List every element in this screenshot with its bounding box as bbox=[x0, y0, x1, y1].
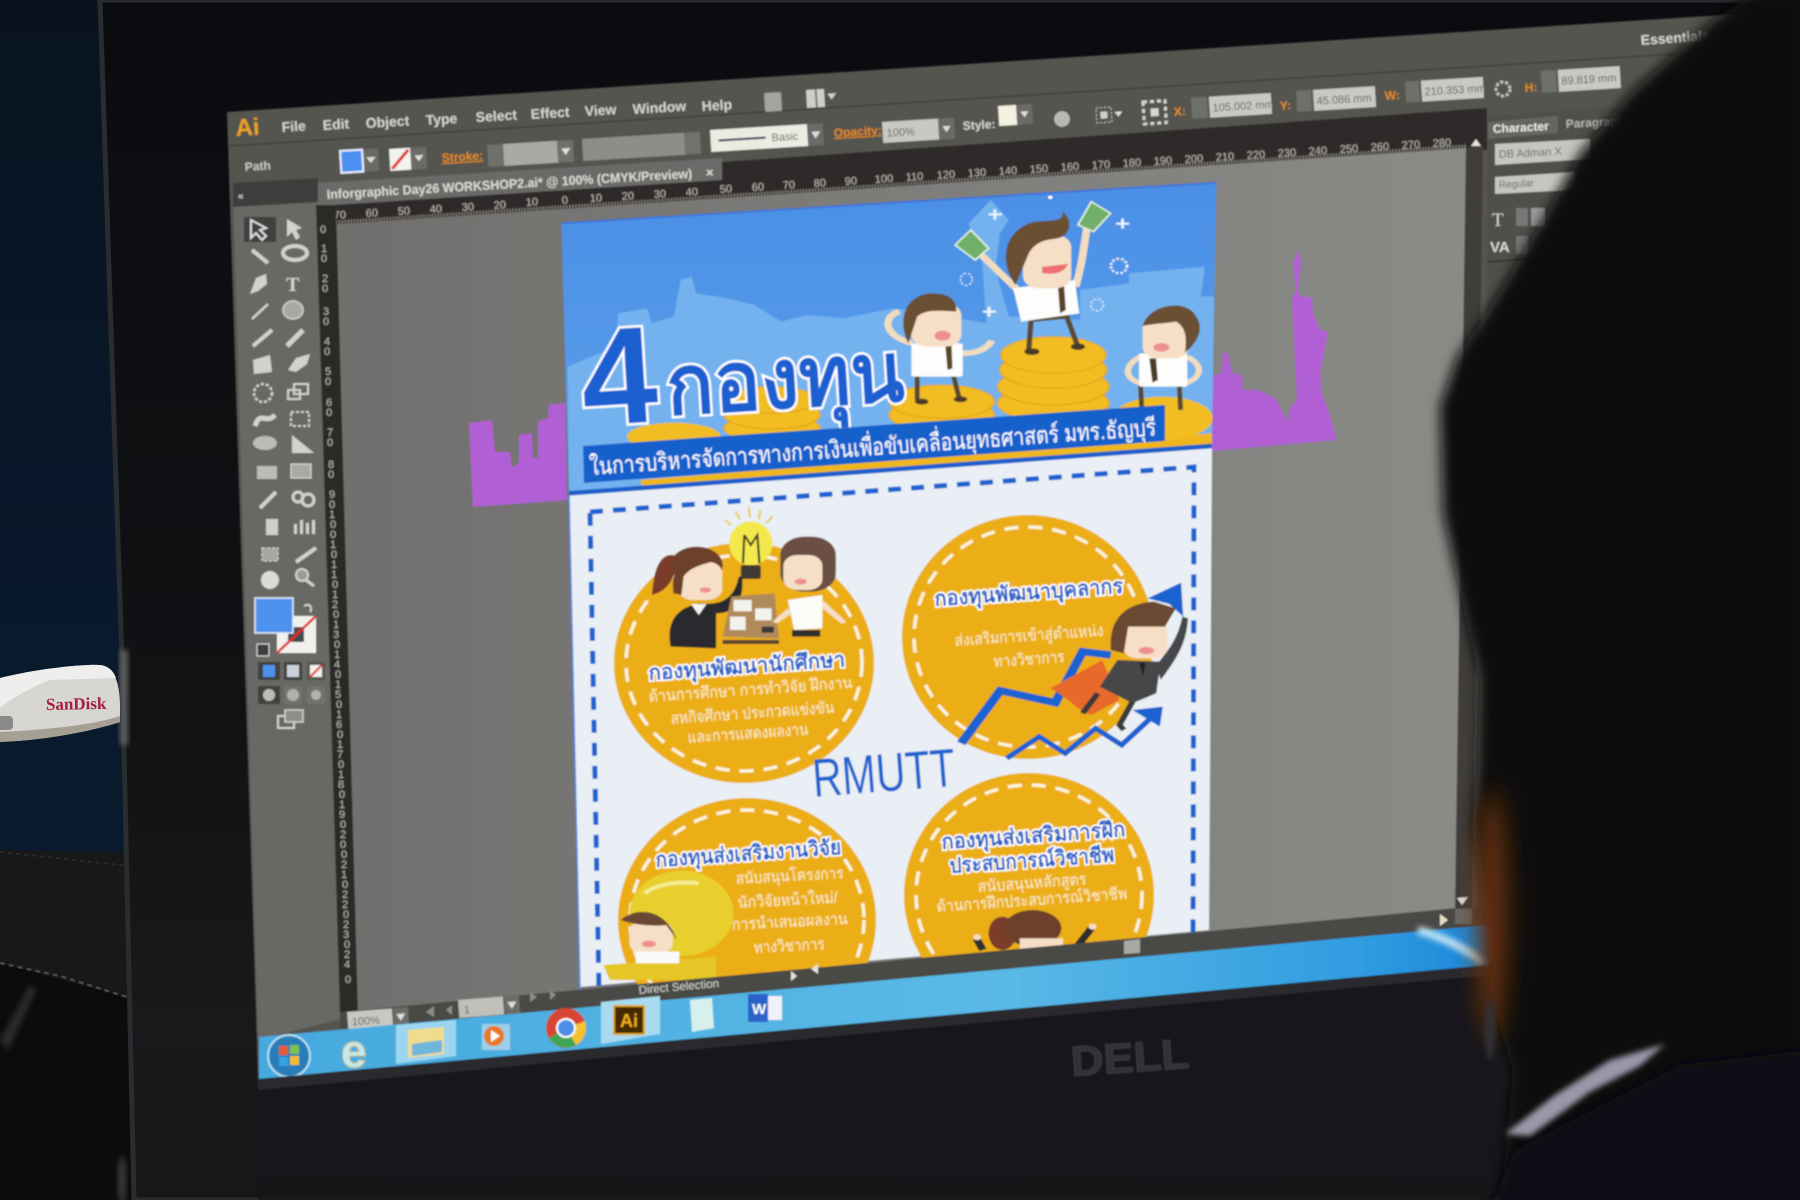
body: ทางวิชาการ bbox=[993, 649, 1065, 671]
right scrollbar bbox=[1455, 139, 1483, 918]
menu select: Select bbox=[475, 106, 518, 125]
person in foreground bbox=[1440, 0, 1800, 1200]
fill swatch bbox=[340, 149, 379, 173]
media player icon bbox=[482, 1024, 510, 1050]
artboard canvas bbox=[336, 148, 1466, 1015]
stroke color box bbox=[277, 616, 316, 653]
coins center stack bbox=[998, 337, 1109, 422]
hand tool bbox=[261, 571, 279, 589]
poster figures bbox=[603, 507, 1188, 980]
purple skyline left bbox=[469, 403, 567, 507]
fund circle: student development bbox=[614, 543, 874, 783]
body bbox=[648, 674, 853, 747]
horizontal ruler: 230 bbox=[1277, 147, 1297, 160]
horizontal ruler: 30 bbox=[653, 188, 666, 201]
subtitle band bbox=[583, 405, 1165, 483]
vertical ruler: 210220230240 bbox=[341, 859, 351, 986]
heading: ประสบการณ์วิชาชีพ bbox=[949, 843, 1115, 878]
variable width bbox=[582, 132, 701, 161]
x value: 105.002 mm bbox=[1212, 99, 1274, 115]
circle text: research bbox=[655, 836, 848, 957]
horizontal ruler: 0 bbox=[561, 195, 568, 207]
zoom level: 100% bbox=[351, 1014, 381, 1029]
horizontal ruler: 100 bbox=[874, 173, 894, 186]
opacity value: 100% bbox=[886, 126, 915, 140]
title thai: กองทุน bbox=[663, 325, 907, 439]
scroll right arrow bbox=[1440, 914, 1448, 926]
word icon bbox=[748, 994, 782, 1022]
horizontal ruler: 260 bbox=[1370, 141, 1390, 154]
illustrator window base bbox=[227, 10, 1800, 1079]
head silhouette bbox=[1440, 0, 1800, 1200]
page arrows bbox=[426, 990, 556, 1017]
document tab: × bbox=[706, 165, 714, 180]
type tool: T bbox=[286, 274, 300, 296]
horizontal ruler: 240 bbox=[1308, 145, 1328, 158]
windows taskbar bbox=[259, 925, 1489, 1079]
eraser tool bbox=[288, 354, 310, 372]
start orb bbox=[268, 1035, 310, 1077]
selection tool bbox=[244, 217, 276, 242]
heading: กองทุนพัฒนานักศึกษา bbox=[648, 648, 846, 687]
research bulb bbox=[603, 871, 733, 980]
y value: Y: bbox=[1279, 98, 1291, 113]
essentials: Essentials bbox=[1640, 27, 1711, 48]
dashed border bbox=[590, 467, 1194, 990]
character panel: Character bbox=[1492, 119, 1549, 136]
body bbox=[954, 622, 1104, 671]
illustrator button: Ai bbox=[620, 1011, 638, 1031]
heading: กองทุนส่งเสริมการฝึก bbox=[941, 818, 1126, 856]
slice tool bbox=[296, 548, 316, 562]
coins under left man bbox=[889, 385, 994, 432]
horizontal ruler: 140 bbox=[998, 165, 1018, 178]
body: การนำเสนอผลงาน bbox=[731, 911, 848, 934]
opacity value bbox=[882, 118, 955, 143]
right man bbox=[1128, 305, 1200, 410]
banner art bbox=[561, 183, 1216, 495]
scale tool bbox=[288, 384, 308, 399]
horizontal ruler: 220 bbox=[1246, 149, 1266, 162]
x value bbox=[1173, 93, 1274, 120]
horizontal ruler: 150 bbox=[1029, 163, 1049, 176]
link icon bbox=[1496, 82, 1510, 96]
body bbox=[731, 863, 848, 957]
screen mode button bbox=[278, 710, 303, 728]
lower bezel bbox=[258, 962, 1495, 1200]
leather chair bbox=[0, 850, 140, 1200]
chrome icon bbox=[546, 1008, 586, 1048]
fund circle: professional training bbox=[904, 773, 1154, 1017]
page selector bbox=[458, 995, 520, 1018]
character panel bbox=[1487, 95, 1800, 420]
w value: 210.353 mm bbox=[1424, 83, 1486, 98]
zoom level bbox=[347, 1007, 409, 1030]
left tools panel bbox=[233, 178, 345, 1040]
bob hair girl bbox=[773, 537, 846, 637]
usb drive bbox=[0, 665, 120, 742]
horizontal ruler: 170 bbox=[1091, 159, 1111, 172]
subtitle text: ในการบริหารจัดการทางการเงินเพื่อขับเคลื่อนยุทธศาสตร์ มทร.ธัญบุรี bbox=[588, 410, 1157, 482]
direct selection label: Direct Selection bbox=[638, 978, 720, 997]
horizontal ruler: 270 bbox=[1401, 139, 1421, 152]
horizontal ruler: 40 bbox=[685, 186, 698, 199]
fill color box bbox=[255, 598, 293, 633]
mesh tool bbox=[257, 466, 277, 479]
artboard tool bbox=[262, 548, 278, 561]
horizontal ruler: 190 bbox=[1153, 155, 1173, 168]
ear glow bbox=[1477, 790, 1507, 1040]
style label: Style: bbox=[962, 117, 996, 133]
w value bbox=[1384, 77, 1486, 104]
horizontal ruler: 10 bbox=[525, 196, 538, 209]
symbol sprayer tool bbox=[266, 519, 278, 535]
status bar bbox=[340, 905, 1490, 1045]
heading: กองทุนพัฒนาบุคลากร bbox=[934, 575, 1125, 613]
horizontal ruler: 60 bbox=[751, 181, 764, 194]
money notes bbox=[955, 202, 1110, 260]
page selector: 1 bbox=[463, 1004, 470, 1017]
lasso tool bbox=[283, 246, 307, 260]
blend tool bbox=[293, 492, 314, 506]
horizontal ruler: 20 bbox=[621, 190, 634, 203]
circle text: personnel development bbox=[934, 575, 1125, 671]
h value bbox=[1524, 66, 1621, 95]
menu window: Window bbox=[632, 98, 687, 117]
training girl bbox=[973, 910, 1096, 952]
body: สนับสนุนหลักสูตร bbox=[977, 871, 1087, 897]
left man bbox=[888, 293, 992, 405]
body: ทางวิชาการ bbox=[753, 936, 825, 957]
ai logo: Ai bbox=[235, 114, 260, 142]
draw mode buttons bbox=[258, 686, 325, 704]
sparkles bbox=[983, 209, 1129, 317]
horizontal ruler: 30 bbox=[461, 201, 474, 214]
selection outline bbox=[561, 183, 1216, 223]
explorer button bbox=[396, 1020, 456, 1064]
menu effect: Effect bbox=[530, 104, 570, 122]
character panel: DB Adman X bbox=[1499, 146, 1563, 161]
brush definition: Basic bbox=[771, 131, 799, 144]
brush definition bbox=[710, 123, 824, 152]
swap colors icon bbox=[304, 605, 311, 612]
horizontal ruler: 50 bbox=[397, 205, 410, 218]
fund circle: personnel development bbox=[902, 515, 1154, 759]
magic wand tool bbox=[252, 250, 268, 263]
transform grid icon bbox=[1143, 101, 1166, 124]
direct selection tool bbox=[287, 219, 302, 240]
bridge icon bbox=[764, 92, 782, 112]
body: ด้านการศึกษา การทำวิจัย ฝึกงาน bbox=[648, 674, 853, 706]
divider menu and control bar bbox=[229, 46, 1800, 146]
scroll corner bbox=[1455, 909, 1472, 924]
eyedropper tool bbox=[260, 492, 276, 508]
horizontal ruler: 60 bbox=[365, 207, 378, 220]
horizontal ruler: 130 bbox=[967, 167, 987, 180]
collar highlight bbox=[1505, 1044, 1665, 1136]
banner bottom edge bbox=[569, 446, 1212, 493]
heading bbox=[941, 818, 1126, 878]
coins middle left bbox=[724, 387, 820, 442]
taskbar light streak bbox=[1418, 930, 1484, 963]
line tool bbox=[252, 304, 268, 319]
horizontal ruler: 280 bbox=[1432, 137, 1452, 150]
ponytail girl bbox=[652, 547, 742, 648]
recolor icon bbox=[1054, 110, 1070, 128]
style swatch bbox=[998, 104, 1033, 126]
w value: W: bbox=[1384, 88, 1400, 103]
illustrator button bbox=[601, 996, 660, 1044]
horizontal ruler: 200 bbox=[1184, 153, 1204, 166]
left tools panel: « bbox=[238, 191, 244, 202]
center man bbox=[980, 212, 1087, 355]
poster blue outline bbox=[569, 495, 580, 990]
jaw grey fringe bbox=[1485, 1000, 1495, 1060]
dell logo: DELL bbox=[1069, 1030, 1190, 1085]
usb drive: SanDisk bbox=[46, 694, 107, 714]
vertical ruler: 010203040506070809 bbox=[320, 224, 335, 501]
scroll thumb bbox=[1124, 939, 1140, 954]
rim highlight bbox=[120, 650, 128, 745]
coins right bbox=[1113, 397, 1213, 440]
vertical ruler: 010010110120130140 bbox=[329, 499, 341, 681]
horizontal ruler: 160 bbox=[1060, 161, 1080, 174]
stroke weight bbox=[487, 140, 574, 167]
graph tool bbox=[294, 520, 315, 534]
control bar bbox=[244, 66, 1621, 174]
character panel: T bbox=[1492, 210, 1504, 231]
body: สนับสนุนโครงการ bbox=[735, 863, 844, 889]
character panel: Regular bbox=[1499, 178, 1535, 191]
coin strip bbox=[640, 433, 1212, 488]
brush tool bbox=[253, 330, 272, 346]
menu type: Type bbox=[425, 110, 458, 128]
x value: X: bbox=[1173, 104, 1186, 119]
path label: Path bbox=[244, 158, 271, 174]
horizontal ruler: 110 bbox=[905, 171, 924, 184]
horizontal ruler: 70 bbox=[782, 179, 795, 192]
menu edit: Edit bbox=[322, 115, 350, 133]
blob eraser tool bbox=[253, 355, 272, 374]
character panel: VA bbox=[1490, 239, 1510, 256]
free transform tool bbox=[291, 412, 309, 426]
opacity label: Opacity: bbox=[833, 123, 882, 140]
notepad icon bbox=[690, 998, 714, 1032]
stroke swatch bbox=[389, 147, 427, 171]
h value: 89.819 mm bbox=[1561, 72, 1617, 88]
horizontal ruler: 180 bbox=[1122, 157, 1142, 170]
desk bbox=[723, 593, 779, 644]
body bbox=[936, 871, 1128, 916]
vertical ruler: 150160170180190200 bbox=[335, 679, 347, 861]
circle text: professional training bbox=[936, 818, 1128, 916]
body: ด้านการฝึกประสบการณ์วิชาชีพ bbox=[936, 884, 1128, 916]
word icon: W bbox=[752, 1001, 767, 1018]
growth arrow main bbox=[961, 583, 1183, 743]
banner sky bbox=[561, 183, 1216, 495]
horizontal ruler: 70 bbox=[333, 209, 346, 222]
horizontal ruler bbox=[316, 108, 1487, 226]
rotate handle bbox=[1047, 195, 1053, 200]
character panel: Paragraph bbox=[1565, 114, 1625, 131]
internet explorer icon: e bbox=[341, 1025, 367, 1077]
title numeral: 4 bbox=[576, 298, 662, 456]
vertical ruler bbox=[316, 205, 358, 1015]
horizontal ruler: 210 bbox=[1215, 151, 1235, 164]
purple skyline with statue right bbox=[1212, 250, 1337, 451]
flying man bbox=[1050, 602, 1188, 730]
scroll arrows bbox=[791, 971, 797, 981]
h value: H: bbox=[1524, 80, 1538, 95]
fill mode buttons bbox=[258, 662, 325, 680]
research man bbox=[621, 912, 679, 963]
pencil tool bbox=[287, 330, 303, 346]
shape builder tool bbox=[253, 436, 277, 450]
zoom tool bbox=[296, 569, 314, 586]
document tab: Inforgraphic Day26 WORKSHOP2.ai* @ 100% (CMYK/Preview) bbox=[326, 166, 693, 202]
arrange icon bbox=[806, 88, 837, 108]
polygon tool bbox=[283, 301, 303, 319]
body: ส่งเสริมการเข้าสู่ตำแหน่ง bbox=[954, 622, 1104, 651]
menu object: Object bbox=[365, 112, 410, 131]
menu view: View bbox=[584, 101, 617, 119]
y value bbox=[1279, 86, 1376, 113]
align icon bbox=[1096, 106, 1123, 123]
stroke label: Stroke: bbox=[441, 148, 483, 165]
gradient tool bbox=[291, 464, 311, 478]
coins left bbox=[627, 423, 721, 451]
horizontal ruler: 10 bbox=[589, 192, 602, 205]
rotate tool bbox=[254, 384, 272, 402]
horizontal ruler: 250 bbox=[1339, 143, 1359, 156]
poster header banner bbox=[561, 183, 1216, 495]
fund circle: research bbox=[618, 798, 876, 1042]
rmutt logo text: RMUTT bbox=[810, 738, 958, 809]
default colors icon bbox=[257, 644, 269, 656]
menu help: Help bbox=[701, 96, 732, 114]
bezel lip bbox=[258, 965, 1489, 1090]
menu bar bbox=[235, 27, 1711, 142]
poster white panel bbox=[569, 447, 1212, 987]
body: สหกิจศึกษา ประกวดแข่งขัน bbox=[670, 700, 835, 728]
menu file: File bbox=[281, 118, 306, 135]
body: และการแสดงผลงาน bbox=[687, 722, 809, 747]
growth arrow small bbox=[1007, 707, 1163, 758]
horizontal ruler: 40 bbox=[429, 203, 442, 216]
circle text: student development bbox=[648, 648, 853, 747]
city skyline bbox=[568, 200, 1214, 495]
perspective grid tool bbox=[292, 435, 314, 453]
horizontal ruler: 80 bbox=[813, 177, 826, 190]
horizontal ruler: 90 bbox=[844, 175, 857, 188]
heading: กองทุนส่งเสริมงานวิจัย bbox=[655, 836, 842, 874]
sparkle rings bbox=[961, 259, 1127, 311]
horizontal ruler: 50 bbox=[719, 183, 732, 196]
horizontal ruler: 20 bbox=[493, 199, 506, 212]
y value: 45.086 mm bbox=[1316, 92, 1372, 108]
warp tool bbox=[255, 415, 275, 426]
shoulder shade bbox=[1490, 1050, 1800, 1200]
bulb bbox=[725, 507, 773, 579]
body: นักวิจัยหน้าใหม่/ bbox=[737, 888, 839, 912]
pen tool bbox=[250, 274, 267, 294]
horizontal ruler: 120 bbox=[936, 169, 956, 182]
